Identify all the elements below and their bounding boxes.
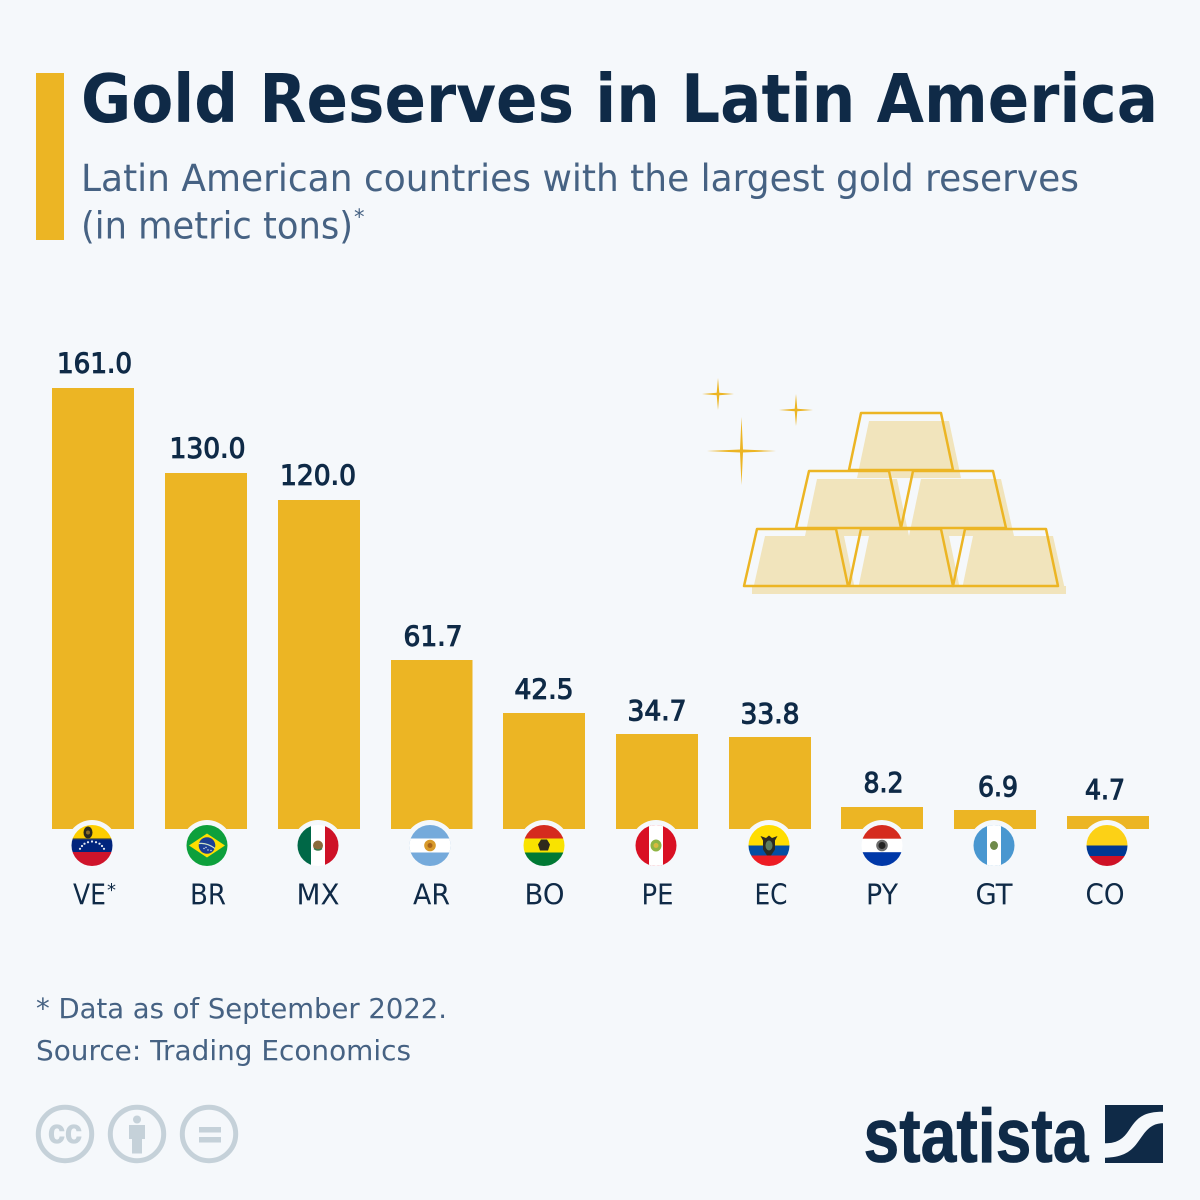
icon: gold bars <box>702 378 1066 594</box>
icon: cc: cc <box>48 1113 82 1151</box>
flag: Brazil <box>186 824 228 866</box>
bar chart <box>52 346 1149 912</box>
value labels: 4.7 <box>1085 773 1125 806</box>
country labels: CO <box>1086 878 1124 912</box>
value labels: 33.8 <box>740 697 800 730</box>
flag: Argentina <box>409 824 451 866</box>
country labels <box>73 878 1124 912</box>
footnote and source: * Data as of September 2022. <box>36 992 447 1025</box>
subtitle: * <box>354 205 364 229</box>
country labels: GT <box>976 878 1013 912</box>
subtitle: (in metric tons) <box>81 204 353 248</box>
icon: cc <box>38 1107 92 1161</box>
logo mark <box>1105 1105 1163 1163</box>
value labels: 161.0 <box>57 346 132 380</box>
country labels: BO <box>524 878 564 912</box>
flag: Guatemala <box>973 824 1015 866</box>
country labels: VE <box>73 878 106 912</box>
country labels: MX <box>296 878 340 912</box>
value labels: 8.2 <box>864 766 904 799</box>
value labels <box>57 346 1125 806</box>
flag halos <box>66 820 1132 871</box>
flag: Bolivia <box>523 824 565 866</box>
bars <box>52 388 1149 829</box>
country labels: PE <box>642 878 674 912</box>
icon: no derivatives <box>182 1107 236 1161</box>
country labels: * <box>107 880 116 901</box>
value labels: 130.0 <box>170 432 246 464</box>
country labels: PY <box>866 878 899 912</box>
value labels: 6.9 <box>978 770 1018 803</box>
flag: Venezuela <box>71 824 113 867</box>
country labels: BR <box>190 878 226 912</box>
flag: Paraguay <box>861 824 903 866</box>
flag: Peru <box>635 824 677 866</box>
flag: Ecuador <box>748 824 790 866</box>
subtitle <box>81 157 1079 248</box>
country labels: AR <box>413 878 450 912</box>
value labels: 61.7 <box>404 620 462 652</box>
accent bar <box>36 73 64 240</box>
footnote and source: Source: Trading Economics <box>36 1034 411 1067</box>
value labels: 34.7 <box>628 694 686 727</box>
country labels: EC <box>754 878 788 912</box>
flag: Colombia <box>1086 824 1128 867</box>
icon: attribution <box>110 1107 164 1161</box>
sparkles <box>702 378 813 485</box>
flag: Mexico <box>297 824 339 866</box>
footnote and source <box>36 992 447 1067</box>
wordmark: statista <box>864 1094 1089 1179</box>
license icons <box>38 1107 236 1161</box>
bar outlines <box>744 413 1058 586</box>
subtitle: Latin American countries with the largest gold reserves <box>81 157 1079 200</box>
value labels: 120.0 <box>280 458 356 492</box>
bar fills <box>752 421 1066 594</box>
statista logo <box>864 1094 1163 1179</box>
value labels: 42.5 <box>514 672 574 706</box>
